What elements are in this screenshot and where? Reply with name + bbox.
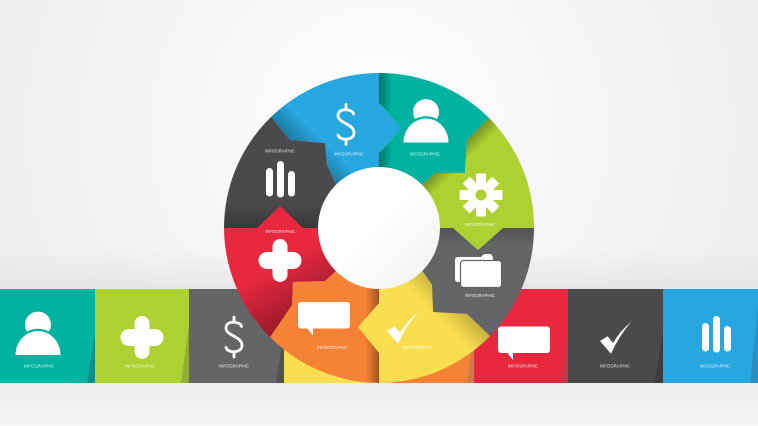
segment: blue dollar [271,73,401,228]
strip cell: blue bars [663,289,758,383]
segment: yellow check [358,228,490,383]
strip cell: yellow [284,289,379,383]
segment: green gear [379,118,534,250]
label: INFOGRAPHIC [219,364,249,368]
label: INFOGRAPHIC [265,148,295,154]
panel: bottom colour strip [0,289,758,383]
hub circle [318,167,440,289]
label: INFOGRAPHIC [465,293,495,298]
icon: person [404,99,448,142]
label: INFOGRAPHIC [600,364,630,368]
label: INFOGRAPHIC [24,364,54,368]
strip cell: orange [379,289,474,383]
icon: gear [460,174,502,216]
icon: plus [258,239,302,282]
segment: red plus [224,206,379,337]
label: INFOGRAPHIC [508,364,538,368]
label: INFOGRAPHIC [700,364,730,368]
icon: plus [120,316,164,359]
label: INFOGRAPHIC [317,345,347,350]
icon: check mark [600,322,631,354]
segment: gray folders [379,228,534,336]
strip cell: red speech bubble [474,289,568,383]
icon: check mark [387,312,418,344]
strip cell: gray dollar [189,289,284,383]
icon: folders [455,254,502,288]
icon: bars [266,161,295,198]
label: INFOGRAPHIC [410,152,440,156]
icon: dollar [338,104,354,144]
icon: person [16,312,60,355]
label: INFOGRAPHIC [334,152,364,156]
chart: segmented wheel [224,73,534,383]
icon: bars [702,316,731,352]
segment: dark bars [224,117,379,228]
segment: teal person [379,73,489,228]
label: INFOGRAPHIC [125,364,155,368]
label: INFOGRAPHIC [465,222,495,227]
label: INFOGRAPHIC [265,229,295,234]
icon: speech bubble [498,326,550,360]
icon: speech bubble [298,302,350,336]
label: INFOGRAPHIC [402,345,432,350]
icon: dollar [226,317,242,357]
strip cell: green plus [95,289,189,383]
segment: orange speech bubble [270,228,379,383]
strip cell: dark check [568,289,663,383]
strip cell: teal person [0,289,95,383]
